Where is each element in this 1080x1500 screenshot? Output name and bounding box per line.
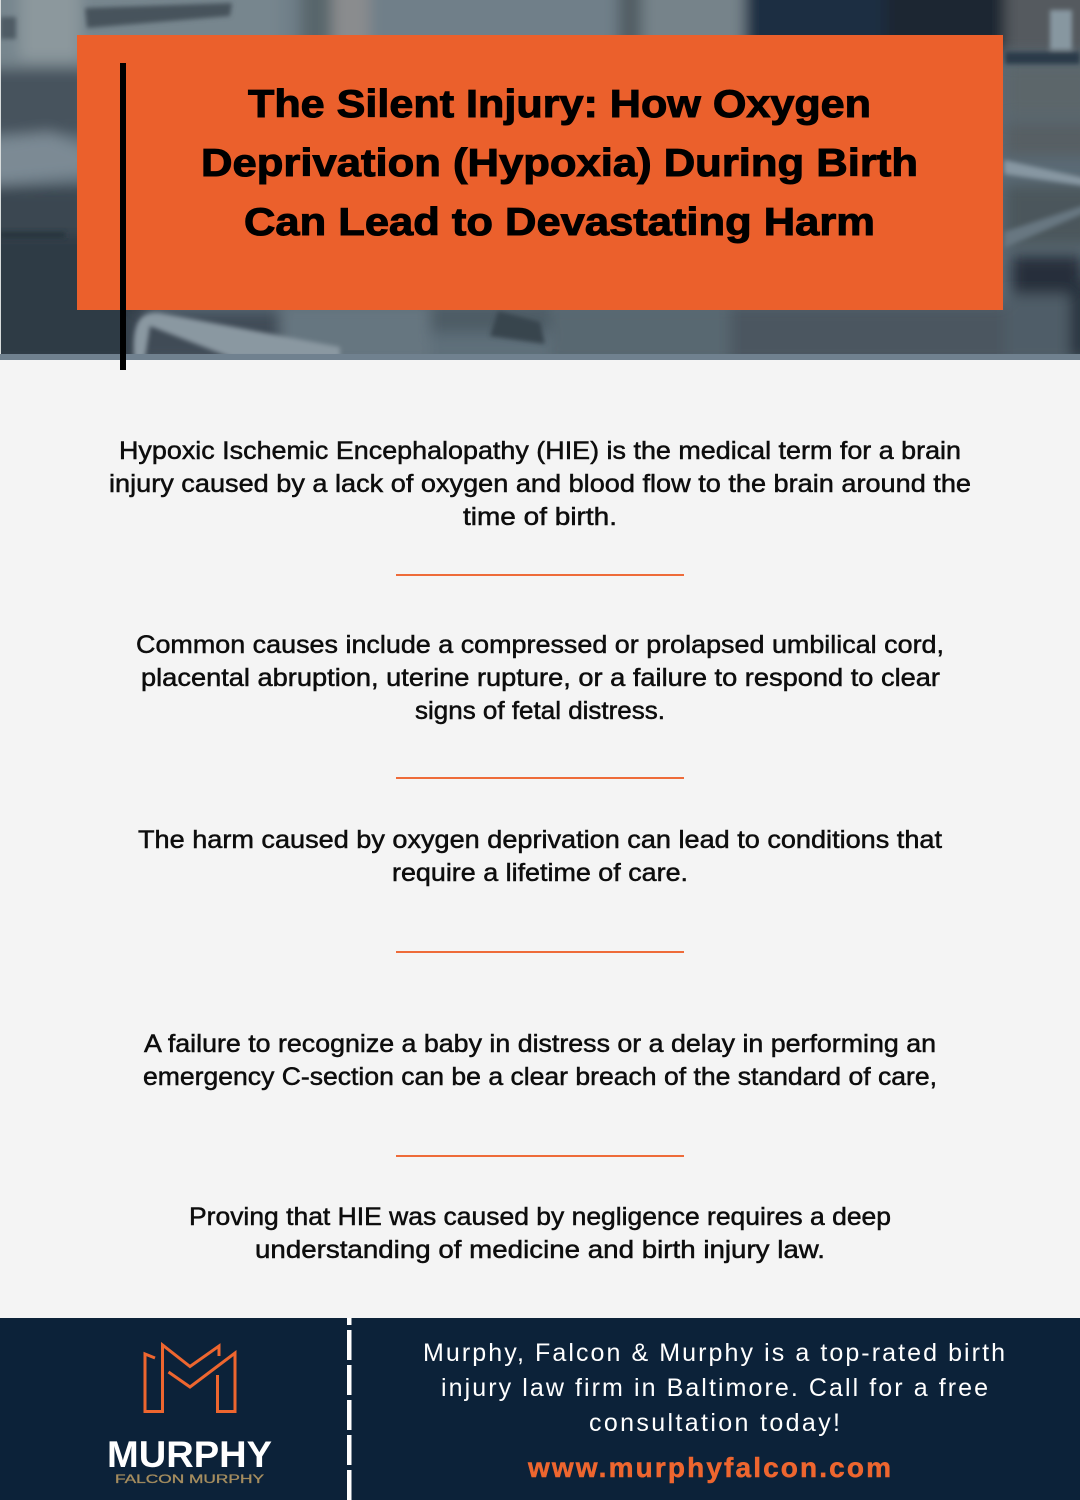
text block: standard of care: A failure to recognize a baby in distress or a delay in performing an: [144, 1030, 936, 1058]
footer band: [0, 1318, 1080, 1500]
text block: what HIE is: [109, 437, 971, 531]
text block: standard of care: [143, 1030, 937, 1091]
title panel: [77, 35, 1003, 310]
logo wordmark: MURPHY: [107, 1434, 272, 1475]
logo subline: FALCON MURPHY: [115, 1474, 264, 1486]
text block: proving negligence: understanding of medicine and birth injury law.: [255, 1236, 825, 1264]
title: [201, 83, 918, 244]
text block: common causes: [136, 631, 944, 725]
text block: common causes: Common causes include a compressed or prolapsed umbilical cord,: [136, 631, 944, 659]
title: The Silent Injury: How Oxygen: [248, 83, 871, 126]
dashed footer divider: [347, 1318, 352, 1500]
title: Can Lead to Devastating Harm: [244, 201, 875, 244]
text block: lifetime harm: require a lifetime of care.: [392, 859, 688, 887]
text block: what HIE is: injury caused by a lack of oxygen and blood flow to the brain around the: [109, 470, 971, 498]
header bottom strip: [0, 354, 1080, 360]
text block: proving negligence: [189, 1203, 891, 1264]
footer call to action text: injury law firm in Baltimore. Call for a free: [441, 1374, 988, 1402]
footer call to action text: [423, 1339, 1005, 1437]
text block: proving negligence: Proving that HIE was caused by negligence requires a deep: [189, 1203, 891, 1231]
text block: lifetime harm: The harm caused by oxygen deprivation can lead to conditions that: [138, 826, 942, 854]
website link: www.murphyfalcon.com: [527, 1452, 891, 1483]
footer call to action text: Murphy, Falcon & Murphy is a top-rated birth: [423, 1339, 1005, 1367]
text block: lifetime harm: [138, 826, 942, 887]
text block: common causes: signs of fetal distress.: [415, 697, 665, 725]
black vertical accent bar: [120, 63, 126, 370]
icon: M monogram: [145, 1345, 235, 1412]
logo: Murphy Falcon Murphy: [107, 1345, 272, 1486]
text block: what HIE is: Hypoxic Ischemic Encephalopathy (HIE) is the medical term for a brain: [119, 437, 961, 465]
title: Deprivation (Hypoxia) During Birth: [201, 142, 918, 185]
text block: what HIE is: time of birth.: [463, 503, 617, 531]
footer call to action text: consultation today!: [589, 1409, 840, 1437]
text block: standard of care: emergency C-section can be a clear breach of the standard of care,: [143, 1063, 937, 1091]
text block: common causes: placental abruption, uterine rupture, or a failure to respond to clear: [141, 664, 940, 692]
header photo: blurred hospital room: [0, 0, 1080, 366]
photo left edge highlight: [0, 0, 1, 354]
